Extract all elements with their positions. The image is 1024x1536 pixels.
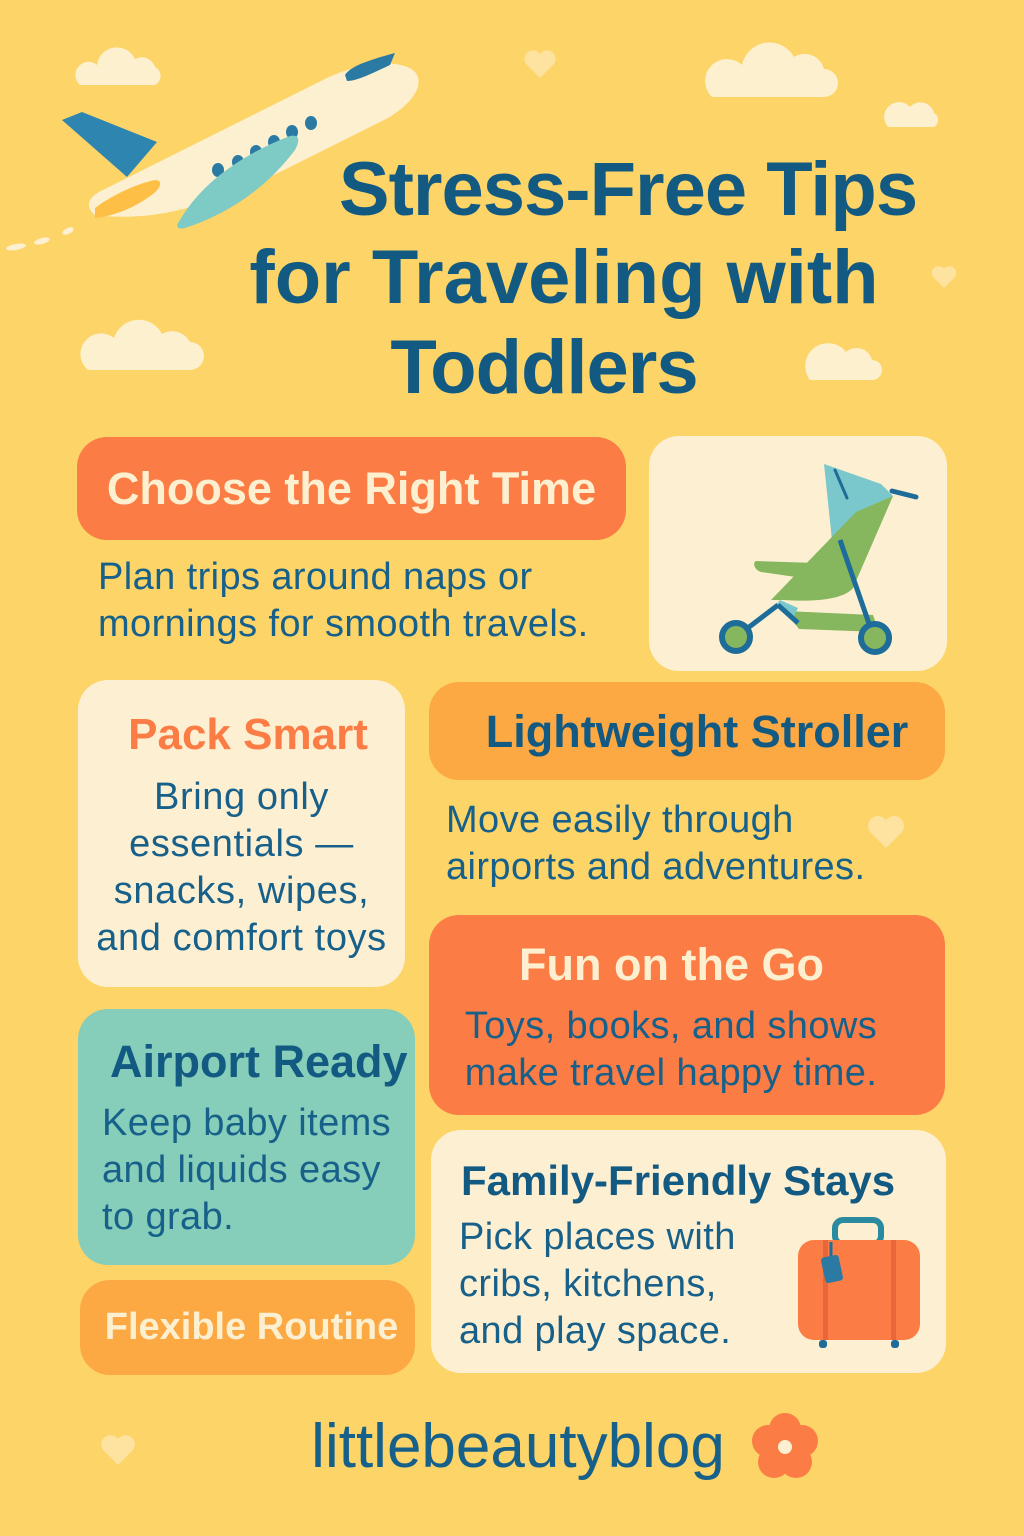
heading: Family-Friendly Stays [461, 1157, 895, 1204]
text: Pick places with [459, 1216, 736, 1258]
footer: brand: littlebeautyblog [311, 1412, 725, 1481]
panel: airport ready [78, 1009, 415, 1265]
icon: suitcase [798, 1217, 920, 1348]
text: cribs, kitchens, [459, 1263, 717, 1305]
panel: choose the right time [77, 437, 626, 645]
heading: Airport Ready [110, 1036, 408, 1087]
panel: fun on the go [429, 915, 945, 1115]
text: airports and adventures. [446, 846, 865, 888]
title: for Traveling with [249, 235, 879, 320]
heading pill: Lightweight Stroller [486, 706, 908, 756]
text: mornings for smooth travels. [98, 603, 589, 645]
title: Stress-Free Tips [339, 147, 917, 232]
heading pill [429, 682, 945, 780]
icon: flower [752, 1413, 818, 1478]
heading pill [77, 437, 626, 540]
heading pill: Choose the Right Time [107, 463, 596, 514]
text: and comfort toys [96, 917, 387, 959]
title [249, 147, 917, 410]
text: Toys, books, and shows [465, 1005, 877, 1047]
panel: family-friendly stays [431, 1130, 946, 1373]
text: Keep baby items [102, 1102, 391, 1144]
icon: stroller [719, 464, 918, 655]
text [459, 1216, 736, 1352]
panel: pack smart [78, 680, 405, 987]
text [465, 1005, 877, 1094]
title: Toddlers [390, 325, 698, 410]
panel: stroller illustration [649, 436, 947, 671]
text [98, 556, 589, 645]
text: snacks, wipes, [114, 870, 369, 912]
panel: lightweight stroller [429, 682, 945, 888]
text: Move easily through [446, 799, 794, 841]
text: Bring only [154, 776, 329, 818]
heading: Pack Smart [128, 710, 368, 759]
text: Plan trips around naps or [98, 556, 533, 598]
panel: flexible routine: Flexible Routine [105, 1306, 398, 1348]
text [102, 1102, 391, 1238]
text: essentials — [129, 823, 354, 865]
text [446, 799, 865, 888]
text: and liquids easy [102, 1149, 381, 1191]
text [96, 776, 387, 959]
icon: airplane [6, 53, 419, 250]
heading: Fun on the Go [519, 939, 824, 990]
text: and play space. [459, 1310, 731, 1352]
panel: flexible routine [80, 1280, 415, 1375]
text: to grab. [102, 1196, 234, 1238]
text: make travel happy time. [465, 1052, 877, 1094]
